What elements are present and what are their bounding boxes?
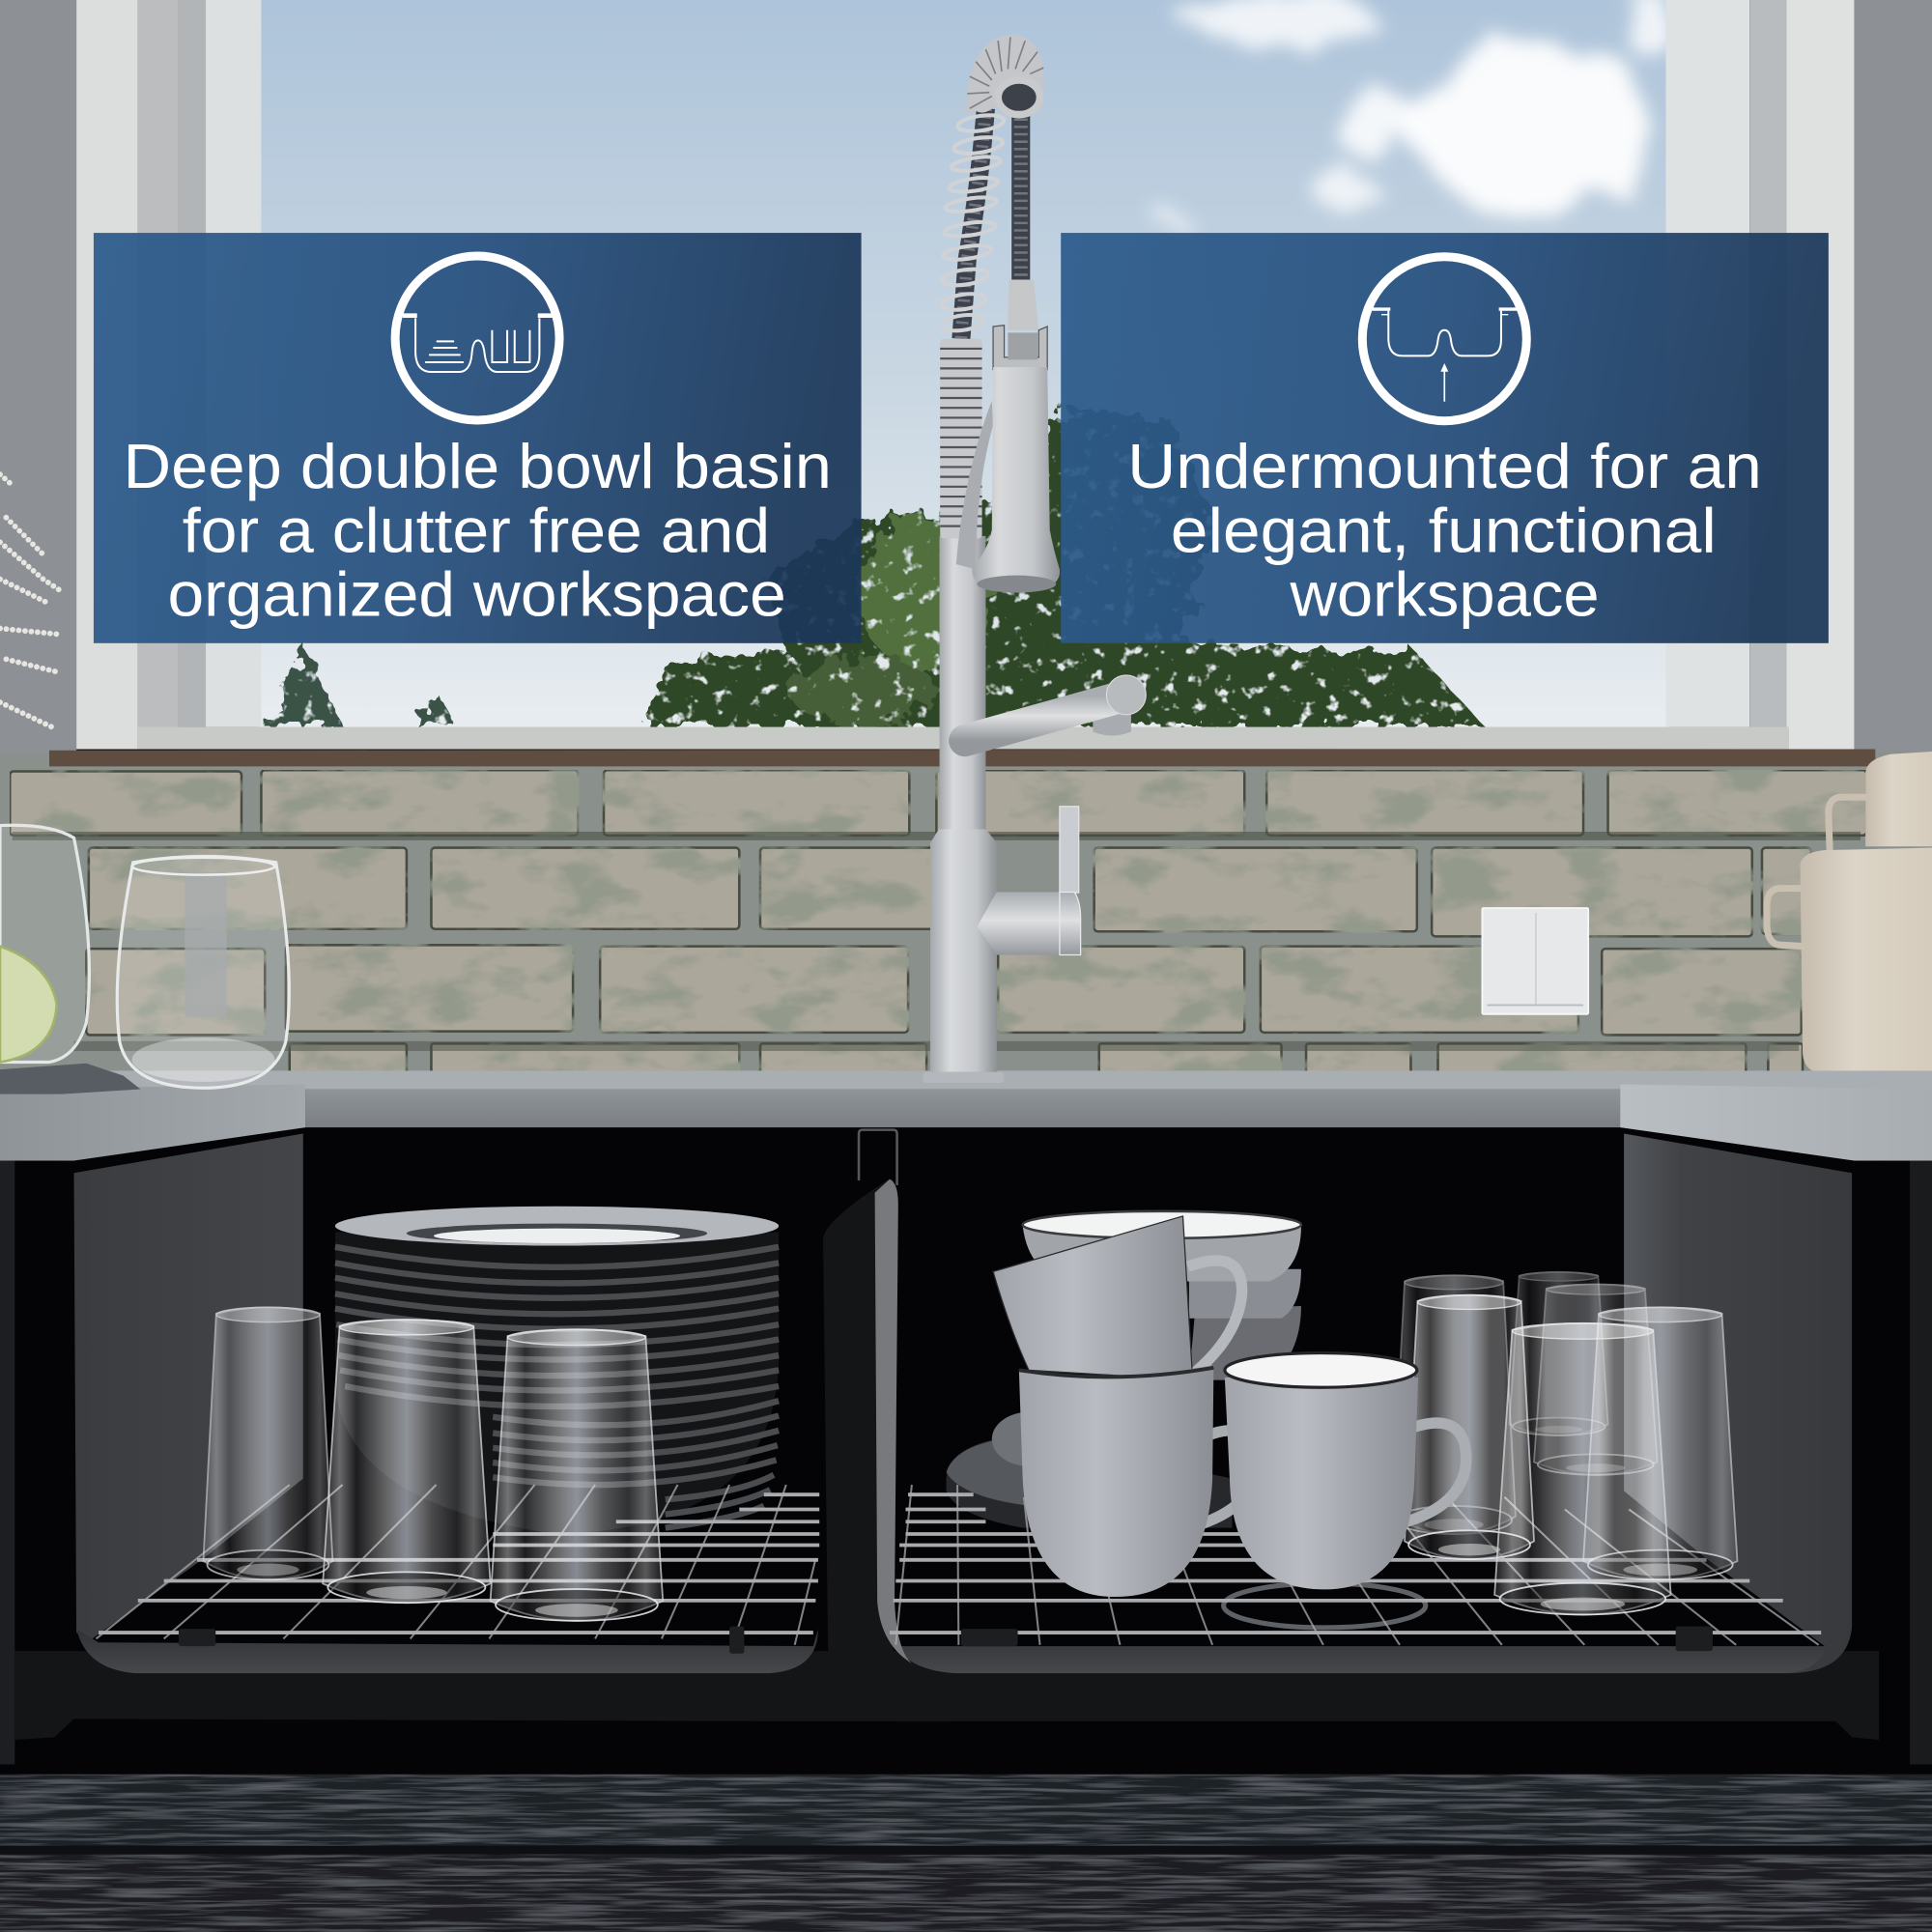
lower canister xyxy=(1801,848,1932,1076)
small plates xyxy=(947,1435,1233,1528)
moss shadow under top course xyxy=(13,832,1861,840)
left bowl wall xyxy=(74,1133,303,1641)
right bowl floor band xyxy=(890,1629,1825,1673)
empty glass xyxy=(117,856,289,1088)
base flange xyxy=(923,1072,1005,1083)
sink cutaway xyxy=(0,1109,1932,1775)
icon: undermount sink with arrow xyxy=(1362,257,1526,421)
right grid xyxy=(890,1485,1821,1645)
spray body xyxy=(972,367,1060,593)
stacked bowls xyxy=(1189,1306,1301,1380)
lower handle xyxy=(1767,889,1805,947)
trees xyxy=(265,407,1485,727)
upper handle xyxy=(1829,797,1866,850)
plate stack xyxy=(335,1207,779,1534)
glass with lime xyxy=(0,825,89,1062)
panel text xyxy=(1127,431,1762,630)
panel text: organized workspace xyxy=(167,559,786,630)
coiled spring head xyxy=(966,35,1044,115)
lower right mug xyxy=(1225,1353,1466,1589)
brick backsplash xyxy=(0,752,1932,1084)
bowl outer shell xyxy=(14,1651,1879,1740)
divider xyxy=(788,1130,955,1721)
sparse spring xyxy=(941,113,1005,333)
back edge xyxy=(0,1070,1932,1090)
left counter xyxy=(0,1084,305,1161)
dense spring xyxy=(940,339,982,538)
lower left mug xyxy=(1019,1365,1257,1597)
top plate xyxy=(335,1207,779,1246)
icon: double bowl with dishes xyxy=(395,256,559,420)
left bowl floor band xyxy=(76,1629,818,1673)
panel text: elegant, functional xyxy=(1171,495,1717,565)
upper tilted mug xyxy=(993,1216,1242,1380)
lower drawer front xyxy=(0,1775,1932,1932)
panel background xyxy=(1061,233,1829,643)
window frame and walls xyxy=(0,0,1932,754)
flowers xyxy=(0,474,62,727)
panel text: for a clutter free and xyxy=(183,495,770,565)
pole xyxy=(940,536,985,832)
spout xyxy=(965,696,1123,741)
right wall xyxy=(1665,0,1749,727)
panel text xyxy=(124,431,832,630)
right counter xyxy=(1620,1084,1932,1161)
lower wood panel xyxy=(0,1855,1932,1932)
handle cap xyxy=(1060,892,1081,955)
spray neck xyxy=(1008,280,1038,330)
left bowl tumblers xyxy=(203,1307,663,1621)
grid feet xyxy=(179,1627,1713,1654)
spout end cap xyxy=(1106,675,1146,715)
lever xyxy=(1060,807,1079,893)
napkin xyxy=(0,1064,140,1094)
upper canister xyxy=(1865,752,1932,846)
mortar xyxy=(0,752,1932,1084)
right bowl tumblers xyxy=(1392,1272,1737,1614)
left grid xyxy=(96,1485,819,1645)
upper wood panel xyxy=(0,1775,1932,1846)
clouds xyxy=(1158,0,1672,229)
front strip xyxy=(305,1090,1622,1127)
bricks xyxy=(10,770,1866,1073)
curved arm xyxy=(956,401,993,569)
wall switch xyxy=(1482,908,1588,1014)
drain xyxy=(1224,1583,1426,1628)
right bowl wall xyxy=(1624,1133,1852,1673)
moss shadow above bottom course xyxy=(74,1041,1799,1051)
sink interior xyxy=(0,1109,1932,1775)
sky xyxy=(259,0,1669,733)
wooden ledge xyxy=(49,750,1875,766)
panel: deep double bowl xyxy=(94,233,862,643)
window sill xyxy=(138,727,1789,750)
handle xyxy=(977,892,1060,955)
mugs xyxy=(993,1216,1466,1597)
spray nozzle xyxy=(977,576,1056,593)
ceramic canisters xyxy=(1767,752,1932,1076)
panel text: Undermounted for an xyxy=(1127,431,1762,501)
panel text: workspace xyxy=(1289,559,1600,630)
seam xyxy=(0,1846,1932,1855)
hose in coil xyxy=(961,108,985,339)
bowl stack and small plates xyxy=(947,1211,1301,1528)
hose right xyxy=(1011,89,1030,283)
faucet xyxy=(923,35,1146,1083)
drinking glasses on counter xyxy=(0,825,289,1094)
spray collar xyxy=(993,326,1047,370)
outer cabinet right xyxy=(1910,1161,1932,1765)
window view xyxy=(259,0,1672,733)
countertop xyxy=(0,1070,1932,1161)
panel: undermounted xyxy=(1061,233,1829,643)
panel text: Deep double bowl basin xyxy=(124,431,832,501)
outer cabinet left xyxy=(0,1161,14,1765)
left wall xyxy=(0,0,76,754)
drain ring and wire grids xyxy=(96,1485,1821,1654)
panel background xyxy=(94,233,862,643)
spout nozzle xyxy=(1093,711,1131,735)
base xyxy=(930,829,997,1072)
